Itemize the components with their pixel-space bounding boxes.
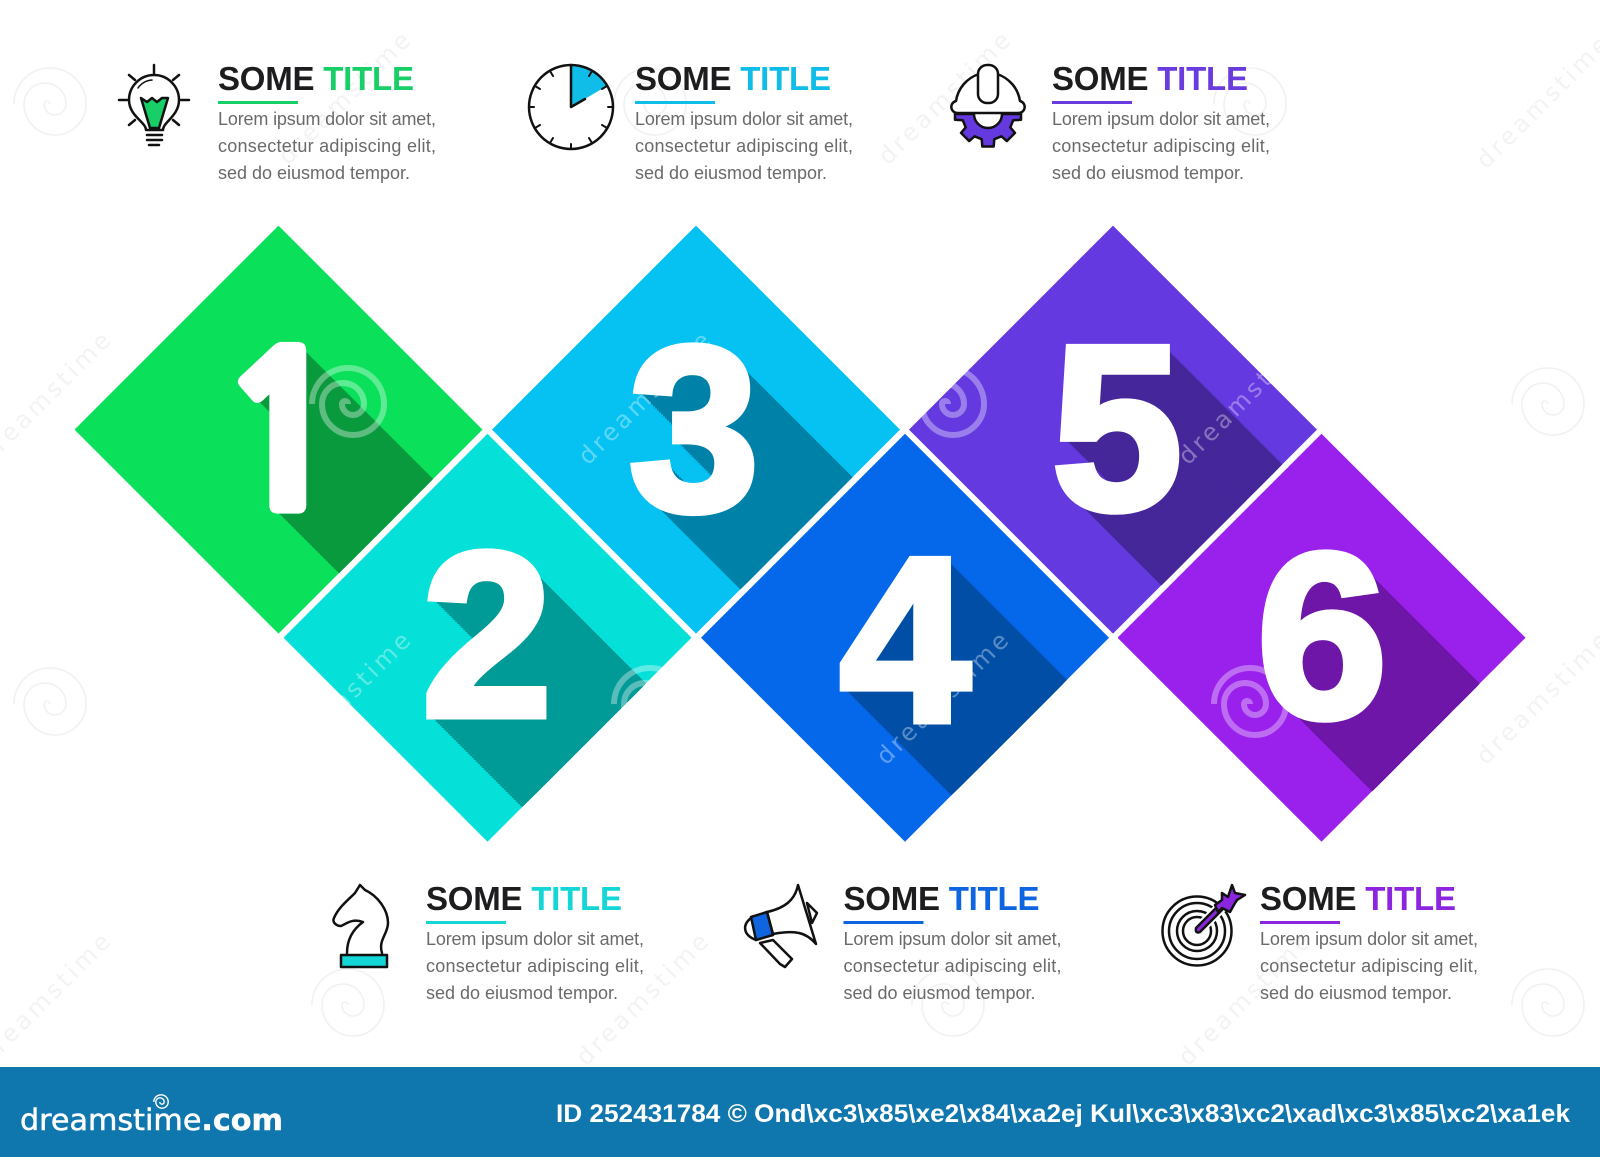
diamond 3: sky blue: [492, 226, 900, 634]
panel: top item 2: [529, 60, 853, 183]
diamond 4: blue: 4: [840, 508, 970, 771]
watermark overlay on diamonds: [273, 327, 1316, 770]
icon: clock: [529, 65, 613, 149]
body text: Lorem ipsum dolor sit amet,: [844, 929, 1062, 949]
title: SOME TITLE: [218, 60, 414, 97]
diamond 1: green: 1: [220, 329, 347, 540]
body text: [635, 109, 853, 183]
body text: consectetur adipiscing elit,: [1052, 136, 1270, 156]
diamond 6: purple: 6: [1257, 504, 1387, 767]
underline: [635, 101, 715, 104]
watermark overlay on diamonds: dreamstime: [273, 627, 416, 770]
body text: sed do eiusmod tempor.: [635, 163, 827, 183]
panel: bottom item 2: [333, 880, 644, 1003]
body text: consectetur adipiscing elit,: [426, 956, 644, 976]
underline: [844, 921, 924, 924]
underline: [1260, 921, 1340, 924]
watermark overlay on diamonds: dreamstime: [1173, 327, 1316, 470]
logo: dreamstime.com: dreamstime.com: [20, 1103, 283, 1137]
icon: megaphone: [745, 885, 817, 967]
title: SOME TITLE: [635, 60, 831, 97]
image ID and credit: ID 252431784 © Ond\xc3\x85\xe2\x84\xa2ej Kul\xc3\x83\xc2\xad\xc3\x85\xc2\xa1ek: [556, 1100, 1570, 1128]
body text: Lorem ipsum dolor sit amet,: [426, 929, 644, 949]
panel: bottom item 6: [1162, 880, 1478, 1003]
title: SOME TITLE: [1052, 60, 1248, 97]
icon: light bulb: [119, 65, 189, 145]
diamond 1: green: [74, 226, 482, 634]
body text: [426, 929, 644, 1003]
underline: [218, 101, 298, 104]
body text: Lorem ipsum dolor sit amet,: [218, 109, 436, 129]
watermark layer on white background: dreamstime: [571, 928, 714, 1071]
diamond 2: teal: [284, 434, 692, 842]
title: SOME TITLE: [1260, 880, 1456, 917]
body text: sed do eiusmod tempor.: [1260, 983, 1452, 1003]
title: SOME TITLE: [844, 880, 1040, 917]
watermark overlay on diamonds: dreamstime: [871, 627, 1014, 770]
body text: [1260, 929, 1478, 1003]
body text: consectetur adipiscing elit,: [635, 136, 853, 156]
body text: sed do eiusmod tempor.: [218, 163, 410, 183]
body text: sed do eiusmod tempor.: [426, 983, 618, 1003]
body text: sed do eiusmod tempor.: [1052, 163, 1244, 183]
icon: target with arrow: [1162, 885, 1245, 966]
watermark layer on white background: dreamstime: [873, 27, 1016, 170]
body text: [218, 109, 436, 183]
body text: consectetur adipiscing elit,: [218, 136, 436, 156]
watermark layer on white background: dreamstime: [273, 27, 416, 170]
body text: sed do eiusmod tempor.: [844, 983, 1036, 1003]
footer bar: [0, 1067, 1600, 1157]
body text: [1052, 109, 1270, 183]
body text: Lorem ipsum dolor sit amet,: [635, 109, 853, 129]
body text: consectetur adipiscing elit,: [844, 956, 1062, 976]
diamond 5: indigo: 5: [1052, 296, 1182, 559]
panel: bottom item 4: [745, 880, 1062, 1003]
diamond 2: teal: 2: [422, 503, 552, 766]
icon: helmet with gear: [951, 65, 1025, 146]
icon: chess knight: [333, 885, 388, 967]
watermark overlay on diamonds: dreamstime: [573, 327, 716, 470]
underline: [1052, 101, 1132, 104]
diamond 4: blue: [701, 434, 1109, 842]
panel: top item 3: [951, 60, 1270, 183]
diamond 5: indigo: [909, 226, 1317, 634]
title: SOME TITLE: [426, 880, 622, 917]
body text: [844, 929, 1062, 1003]
underline: [426, 921, 506, 924]
diamond 3: sky blue: 3: [629, 297, 759, 560]
body text: consectetur adipiscing elit,: [1260, 956, 1478, 976]
watermark layer on white background: dreamstime: [1173, 928, 1316, 1071]
body text: Lorem ipsum dolor sit amet,: [1260, 929, 1478, 949]
body text: Lorem ipsum dolor sit amet,: [1052, 109, 1270, 129]
panel: top item 1: [119, 60, 436, 183]
diamond 6: purple: [1118, 434, 1526, 842]
